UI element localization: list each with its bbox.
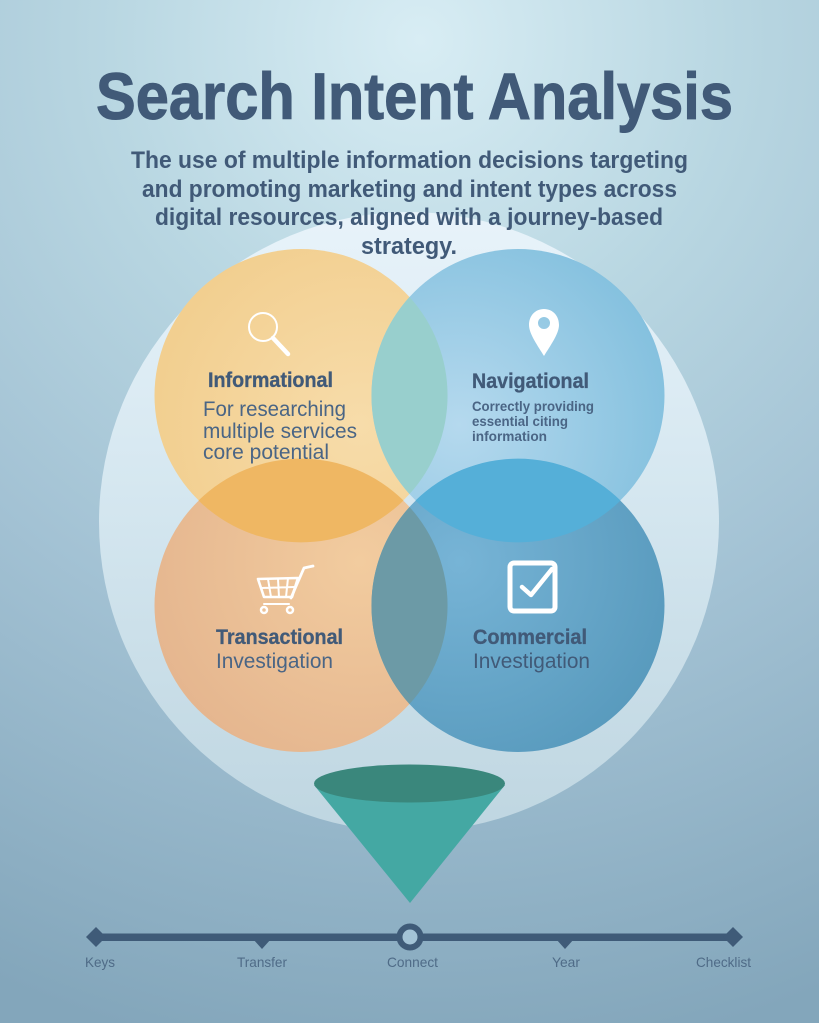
icon: checkbox <box>510 563 555 611</box>
heading: navigational: Navigational <box>472 370 589 393</box>
circle: informational <box>154 249 448 542</box>
description: informational: core potential <box>203 440 329 464</box>
panel: commercial <box>473 563 590 673</box>
marker: year <box>556 939 574 949</box>
icon: shopping cart <box>258 566 313 613</box>
panel: informational <box>203 313 357 464</box>
marker: connect <box>400 926 420 948</box>
description: navigational <box>472 398 594 444</box>
subtitle: digital resources, aligned with a journey-based <box>155 204 663 231</box>
description: navigational: essential citing <box>472 413 568 429</box>
icon: map pin <box>529 309 559 356</box>
description: navigational: Correctly providing <box>472 398 594 414</box>
description: informational <box>203 397 357 464</box>
description: navigational: information <box>472 428 547 444</box>
overlap: transactional and commercial <box>371 507 448 704</box>
description: informational: For researching <box>203 397 346 421</box>
circle: commercial <box>372 459 664 752</box>
timeline labels: Connect <box>387 954 438 970</box>
overlap: navigational and commercial <box>416 459 620 542</box>
circle: navigational <box>372 249 664 542</box>
subtitle: and promoting marketing and intent types across <box>142 176 677 203</box>
heading: transactional: Transactional <box>216 626 343 649</box>
subtitle <box>131 147 688 260</box>
timeline labels: Year <box>552 954 580 970</box>
circle: transactional <box>154 459 448 752</box>
description: commercial: Investigation <box>473 649 590 673</box>
subtitle: The use of multiple information decisions targeting <box>131 147 688 174</box>
panel: navigational <box>472 309 594 444</box>
timeline <box>85 926 751 970</box>
marker: transfer <box>253 939 271 949</box>
overlap: informational and transactional <box>198 459 404 542</box>
venn diagram <box>154 249 664 752</box>
description: informational: multiple services <box>203 419 357 443</box>
heading: informational: Informational <box>208 369 333 392</box>
timeline labels: Checklist <box>696 954 751 970</box>
marker: keys <box>86 927 106 947</box>
subtitle: strategy. <box>361 233 457 260</box>
timeline bar <box>96 934 733 941</box>
large background circle <box>99 212 719 832</box>
overlap: informational and navigational <box>371 297 448 494</box>
panel: transactional <box>216 566 343 673</box>
icon: funnel <box>314 764 505 903</box>
timeline labels <box>85 954 751 970</box>
timeline labels: Transfer <box>237 954 287 970</box>
marker: checklist <box>723 927 743 947</box>
heading: commercial: Commercial <box>473 626 587 649</box>
icon: magnifying glass <box>249 313 288 354</box>
timeline labels: Keys <box>85 954 115 970</box>
title: Search Intent Analysis <box>96 59 733 133</box>
description: transactional: Investigation <box>216 649 333 673</box>
